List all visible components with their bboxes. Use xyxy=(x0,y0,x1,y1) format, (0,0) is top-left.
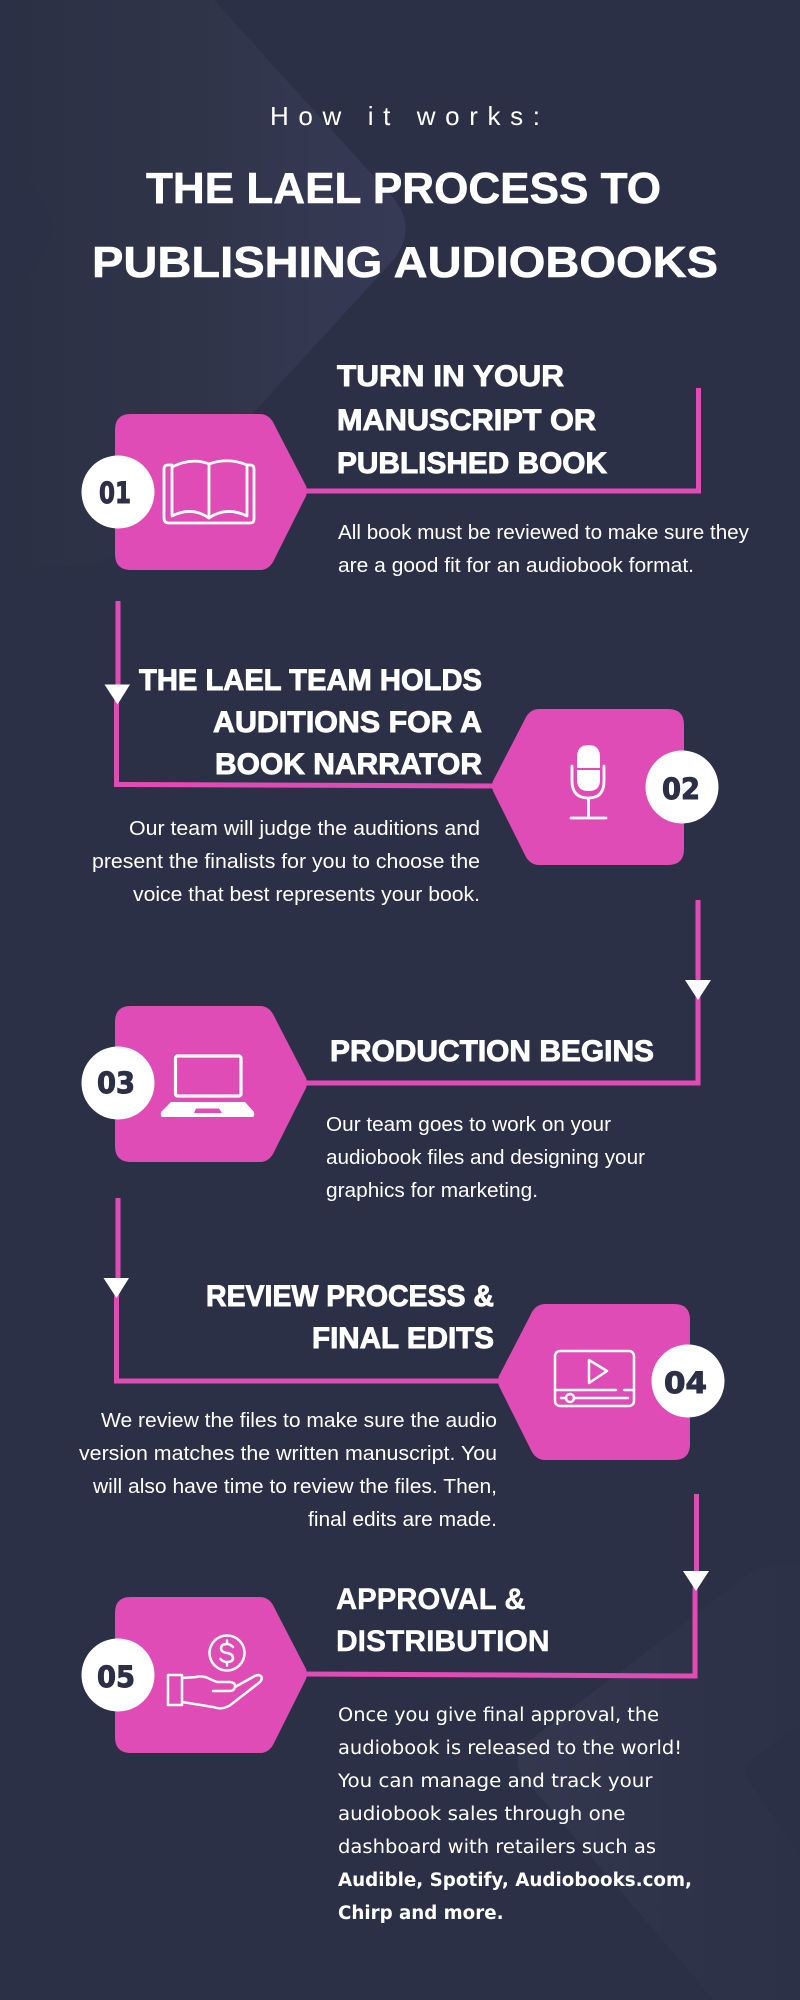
step 4 body xyxy=(79,1410,497,1531)
arrow 4 xyxy=(104,1278,129,1298)
title: THE LAEL PROCESS TO xyxy=(146,164,661,213)
step 5 body: Chirp and more. xyxy=(338,1903,504,1924)
step 4 number xyxy=(652,1344,724,1418)
step 1 number xyxy=(82,456,154,528)
step 1 heading: TURN IN YOUR xyxy=(337,360,564,393)
connector 2 xyxy=(116,601,495,786)
step 5 body: dashboard with retailers such as xyxy=(338,1837,656,1858)
step 3 number xyxy=(82,1046,154,1120)
step 4 body: final edits are made. xyxy=(308,1509,497,1531)
step 2 number: 02 xyxy=(662,772,700,806)
step 1 number: 01 xyxy=(99,476,131,510)
step 3 number: 03 xyxy=(97,1066,135,1100)
step 4 badge xyxy=(498,1304,690,1460)
step 3 xyxy=(82,900,711,1202)
step 2 heading: BOOK NARRATOR xyxy=(215,748,482,781)
step 5 body: Once you give final approval, the xyxy=(338,1705,659,1726)
step 4 heading: FINAL EDITS xyxy=(312,1322,494,1355)
title xyxy=(92,164,718,287)
connector 5 xyxy=(305,1494,696,1676)
step 2 heading: THE LAEL TEAM HOLDS xyxy=(139,664,482,697)
step 2 heading: AUDITIONS FOR A xyxy=(213,706,482,739)
step 4 body: We review the files to make sure the audio xyxy=(101,1410,497,1432)
background shape: bottom xyxy=(518,1563,800,2000)
step 5 badge xyxy=(115,1597,307,1753)
icon: video player xyxy=(555,1351,634,1406)
step 1 heading: MANUSCRIPT OR xyxy=(337,404,596,437)
step 5 body: audiobook is released to the world! xyxy=(338,1738,682,1759)
step 3 body xyxy=(326,1114,645,1202)
icon: open book xyxy=(164,461,254,523)
title: PUBLISHING AUDIOBOOKS xyxy=(92,238,718,287)
icon: microphone xyxy=(571,745,606,818)
step 4 xyxy=(79,1198,724,1531)
connector 1 xyxy=(305,388,698,491)
step 4 body: version matches the written manuscript. You xyxy=(79,1443,497,1465)
step 2 xyxy=(92,601,718,906)
step 2 number xyxy=(646,750,718,824)
subtitle: How it works: xyxy=(270,101,540,131)
step 2 body xyxy=(92,818,480,906)
step 5 number: 05 xyxy=(97,1660,135,1694)
step 1 body: All book must be reviewed to make sure they xyxy=(338,522,749,544)
step 2 badge xyxy=(492,709,684,865)
step 5 body: audiobook sales through one xyxy=(338,1804,626,1825)
step 3 body: graphics for marketing. xyxy=(326,1180,538,1202)
step 2 body: present the finalists for you to choose the xyxy=(92,851,480,873)
step 5 xyxy=(82,1494,709,1924)
background shape: top xyxy=(0,0,406,566)
background shape: top left notch xyxy=(0,150,51,304)
step 3 body: Our team goes to work on your xyxy=(326,1114,611,1136)
arrow 5 xyxy=(683,1571,709,1591)
step 4 heading: REVIEW PROCESS & xyxy=(206,1280,494,1313)
step 5 heading xyxy=(336,1583,550,1658)
step 1 xyxy=(82,360,749,577)
step 1 heading: PUBLISHED BOOK xyxy=(337,447,607,480)
step 4 body: will also have time to review the files. Then, xyxy=(92,1476,497,1498)
step 5 body: Audible, Spotify, Audiobooks.com, xyxy=(338,1870,692,1891)
step 2 body: Our team will judge the auditions and xyxy=(129,818,480,840)
arrow 2 xyxy=(104,684,130,704)
connector 3 xyxy=(305,900,698,1083)
step 5 body: You can manage and track your xyxy=(337,1771,653,1792)
icon: laptop xyxy=(161,1056,254,1117)
step 1 heading xyxy=(337,360,607,480)
step 2 heading xyxy=(139,664,482,781)
step 3 badge xyxy=(115,1006,307,1162)
background shape: bottom right notch xyxy=(746,1724,800,1855)
arrow 3 xyxy=(685,980,711,1000)
step 4 number: 04 xyxy=(664,1366,707,1400)
step 1 body xyxy=(338,522,749,577)
icon: hand with coin xyxy=(168,1636,262,1708)
step 4 heading xyxy=(206,1280,494,1355)
step 3 body: audiobook files and designing your xyxy=(326,1147,645,1169)
step 5 number xyxy=(82,1638,154,1712)
step 2 body: voice that best represents your book. xyxy=(133,884,480,906)
step 1 badge xyxy=(115,414,307,570)
step 5 body xyxy=(337,1705,692,1924)
step 3 heading: PRODUCTION BEGINS xyxy=(330,1035,654,1068)
step 1 body: are a good fit for an audiobook format. xyxy=(338,555,694,577)
step 5 heading: DISTRIBUTION xyxy=(336,1625,550,1658)
connector 4 xyxy=(116,1198,501,1381)
step 5 heading: APPROVAL & xyxy=(336,1583,526,1616)
